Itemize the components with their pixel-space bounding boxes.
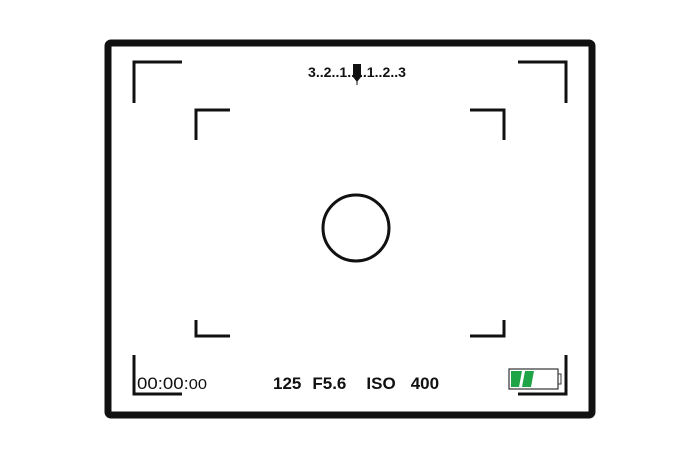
timecode: 00:00: 00 [137,374,207,393]
focus circle [323,195,389,261]
outer corner brackets [134,62,566,394]
inner corner brackets [196,110,504,336]
exposure settings: 125 F5.6 ISO 400 [273,374,439,393]
icon: battery [509,369,561,389]
exposure scale [308,64,407,85]
frame [108,43,592,415]
exposure scale: 3..2..1.....1..2..3 [308,65,407,80]
